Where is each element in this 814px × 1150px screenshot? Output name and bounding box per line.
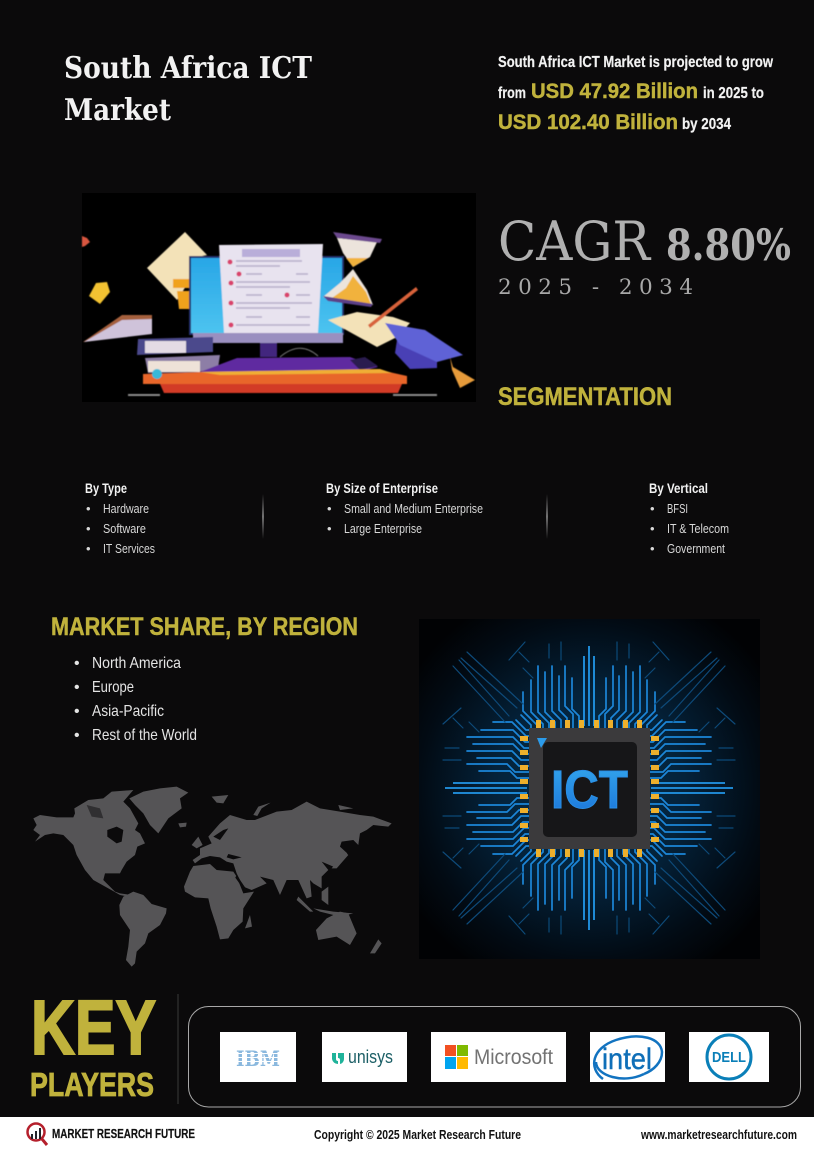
segment: by type: Hardware	[103, 501, 149, 516]
segment: by vertical: •	[650, 501, 655, 516]
logo: IBM	[220, 1032, 296, 1082]
circuit traces	[443, 642, 735, 934]
title: Market	[64, 93, 171, 128]
segment: by size of enterprise: By Size of Enterprise	[326, 481, 438, 496]
key players heading: PLAYERS	[30, 1066, 154, 1103]
books stack left	[83, 315, 220, 373]
region list: Europe	[92, 679, 134, 696]
logo: Unisys: unisys	[348, 1047, 393, 1067]
logo: Market Research Future	[28, 1124, 195, 1145]
segment: by type	[85, 481, 155, 556]
divider	[178, 994, 179, 1104]
icon: pencil	[368, 287, 418, 328]
hourglass	[323, 232, 382, 307]
logo: Market Research Future: MARKET RESEARCH FUTURE	[52, 1126, 195, 1141]
divider	[546, 494, 548, 539]
CAGR years: 2025 - 2034	[498, 275, 693, 300]
market projection text: from	[498, 85, 526, 102]
market projection text	[498, 54, 774, 134]
segment: by vertical: BFSI	[667, 501, 688, 516]
segment: by vertical: •	[650, 541, 655, 556]
icon: yellow sticky	[89, 282, 110, 304]
region list: •	[74, 727, 80, 744]
icon: red corner shape	[82, 236, 90, 247]
logo: Microsoft	[431, 1032, 566, 1082]
segment: by vertical: IT & Telecom	[667, 521, 729, 536]
segment: by vertical: Government	[667, 541, 725, 556]
title: South Africa ICT	[64, 51, 313, 86]
icon: notebook page	[147, 232, 207, 300]
illustration: computer on desk with books	[82, 193, 476, 402]
market projection text: USD 102.40 Billion	[498, 110, 678, 134]
key players heading	[30, 985, 156, 1103]
region list: North America	[92, 655, 181, 672]
chip body	[529, 728, 650, 849]
key players panel	[188, 1006, 800, 1107]
segment: by vertical: By Vertical	[649, 481, 708, 496]
title	[64, 51, 313, 128]
ICT label: ICT	[551, 760, 628, 820]
logo: Intel	[590, 1032, 665, 1082]
segment: by type: •	[86, 501, 91, 516]
logo: Dell	[689, 1032, 769, 1082]
region list: •	[74, 703, 80, 720]
ICT chip image	[419, 619, 760, 959]
segment: by vertical: •	[650, 521, 655, 536]
CAGR figure: CAGR	[498, 210, 651, 273]
copyright: Copyright © 2025 Market Research Future	[314, 1127, 521, 1142]
segment: by type: •	[86, 541, 91, 556]
segment: by type: Software	[103, 521, 146, 536]
segment: by size of enterprise: •	[327, 521, 332, 536]
icon: sticky tabs	[173, 279, 192, 309]
logo: IBM: IBM	[236, 1046, 280, 1071]
segment: by type: By Type	[85, 481, 127, 496]
desk	[128, 369, 437, 396]
icon: graduation cap	[385, 323, 475, 388]
market projection text: by 2034	[682, 116, 731, 133]
segment: by vertical	[649, 481, 729, 556]
mouse	[350, 357, 378, 370]
segment: by size of enterprise	[326, 481, 483, 536]
logo: Intel: intel	[602, 1043, 652, 1076]
market share heading: MARKET SHARE, BY REGION	[51, 613, 358, 641]
segmentation heading: SEGMENTATION	[498, 383, 672, 411]
keyboard	[200, 357, 378, 372]
region list: •	[74, 655, 80, 672]
footer bar	[0, 1117, 814, 1150]
segment: by size of enterprise: Small and Medium Enterprise	[344, 501, 483, 516]
CAGR figure	[498, 210, 791, 273]
segment: by type: •	[86, 521, 91, 536]
region list: Rest of the World	[92, 727, 197, 744]
logo: Microsoft: Microsoft	[474, 1046, 553, 1069]
CAGR figure: 8.80%	[666, 221, 791, 271]
chip pins	[520, 720, 659, 857]
logo: Dell: DELL	[712, 1049, 746, 1066]
region list: Asia-Pacific	[92, 703, 164, 720]
map: inland water	[87, 805, 248, 892]
logo: Unisys	[322, 1032, 407, 1082]
icon: note page	[328, 312, 410, 347]
segment: by size of enterprise: Large Enterprise	[344, 521, 422, 536]
icon: chip corner marker	[537, 738, 547, 748]
region list	[74, 655, 197, 744]
quiz paper	[219, 244, 323, 333]
divider	[262, 494, 264, 539]
region list: •	[74, 679, 80, 696]
world map	[33, 787, 392, 967]
key players heading: KEY	[31, 985, 156, 1071]
market projection text: in 2025 to	[703, 85, 764, 102]
segment: by type: IT Services	[103, 541, 155, 556]
market projection text: USD 47.92 Billion	[531, 79, 698, 103]
monitor	[190, 257, 343, 357]
segment: by size of enterprise: •	[327, 501, 332, 516]
